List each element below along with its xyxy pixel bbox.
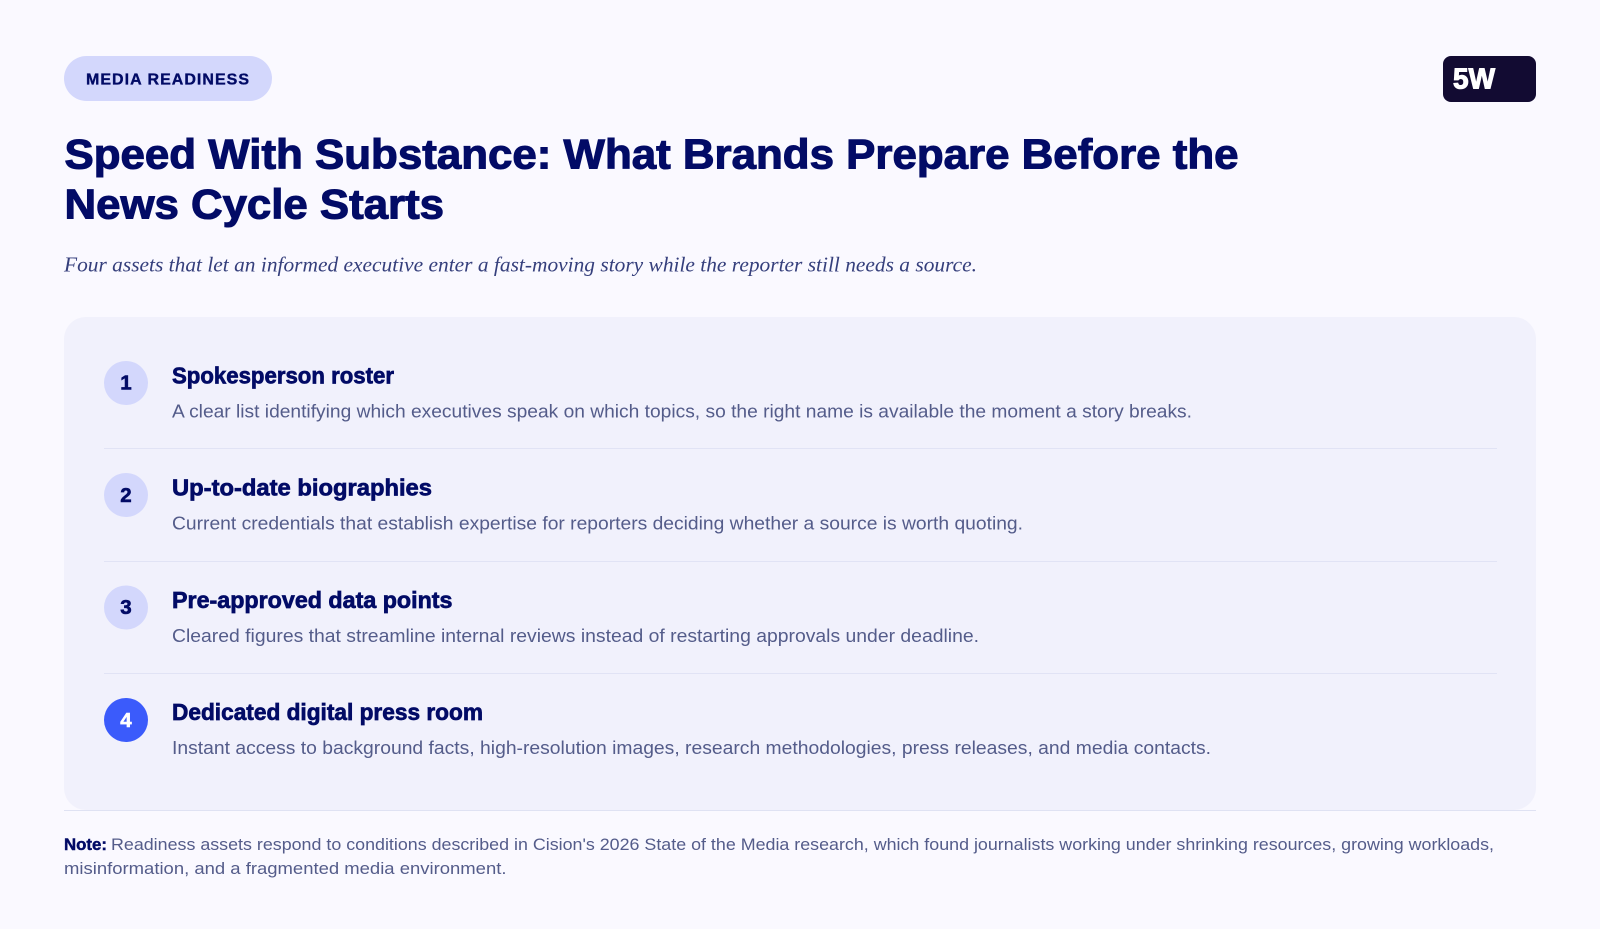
title: Speed With Substance: What Brands Prepare Before the xyxy=(64,130,1238,177)
item 1: spokesperson roster: A clear list identifying which executives speak on which topics, so the right name is available the moment a story breaks. xyxy=(172,401,1192,421)
item 2: up-to-date biographies: Current credentials that establish expertise for reporters deciding whether a source is worth quoting. xyxy=(172,514,1023,534)
item 3: pre-approved data points: 3 xyxy=(120,596,132,619)
item 3: pre-approved data points: Cleared figures that streamline internal reviews instead of restarting approvals under deadline. xyxy=(172,626,979,646)
item 1: spokesperson roster: Spokesperson roster xyxy=(172,362,394,388)
note: Readiness assets respond to conditions described in Cision's 2026 State of the Media research, which found journalists working under shrinking resources, growing workloads, xyxy=(111,836,1494,854)
item 1: spokesperson roster xyxy=(104,361,1192,421)
item 2: up-to-date biographies: 2 xyxy=(120,484,132,507)
item 3: pre-approved data points xyxy=(104,586,979,646)
item 4: dedicated digital press room xyxy=(104,698,1211,758)
item 4: dedicated digital press room: 4 xyxy=(120,709,132,732)
note: Note: xyxy=(64,836,107,854)
tag pill: media readiness xyxy=(64,56,272,101)
logo: 5W xyxy=(1443,56,1536,102)
subtitle: Four assets that let an informed executive enter a fast-moving story while the reporter still needs a source. xyxy=(63,252,977,276)
item 2: up-to-date biographies: Up-to-date biographies xyxy=(172,475,432,501)
item 3: pre-approved data points: Pre-approved data points xyxy=(172,587,452,613)
item 4: dedicated digital press room: Dedicated digital press room xyxy=(172,699,483,725)
item 2: up-to-date biographies xyxy=(104,473,1023,534)
title xyxy=(64,130,1238,227)
item 1: spokesperson roster: 1 xyxy=(120,372,132,394)
item 4: dedicated digital press room: Instant access to background facts, high-resolution images, research methodologies, press releases, and media contacts. xyxy=(172,738,1211,758)
note: misinformation, and a fragmented media environment. xyxy=(64,860,506,878)
title: News Cycle Starts xyxy=(64,180,444,227)
note xyxy=(64,836,1494,878)
tag pill: media readiness: MEDIA READINESS xyxy=(86,71,249,88)
logo: 5W: 5W xyxy=(1453,64,1496,96)
panel: readiness assets list xyxy=(64,317,1536,810)
